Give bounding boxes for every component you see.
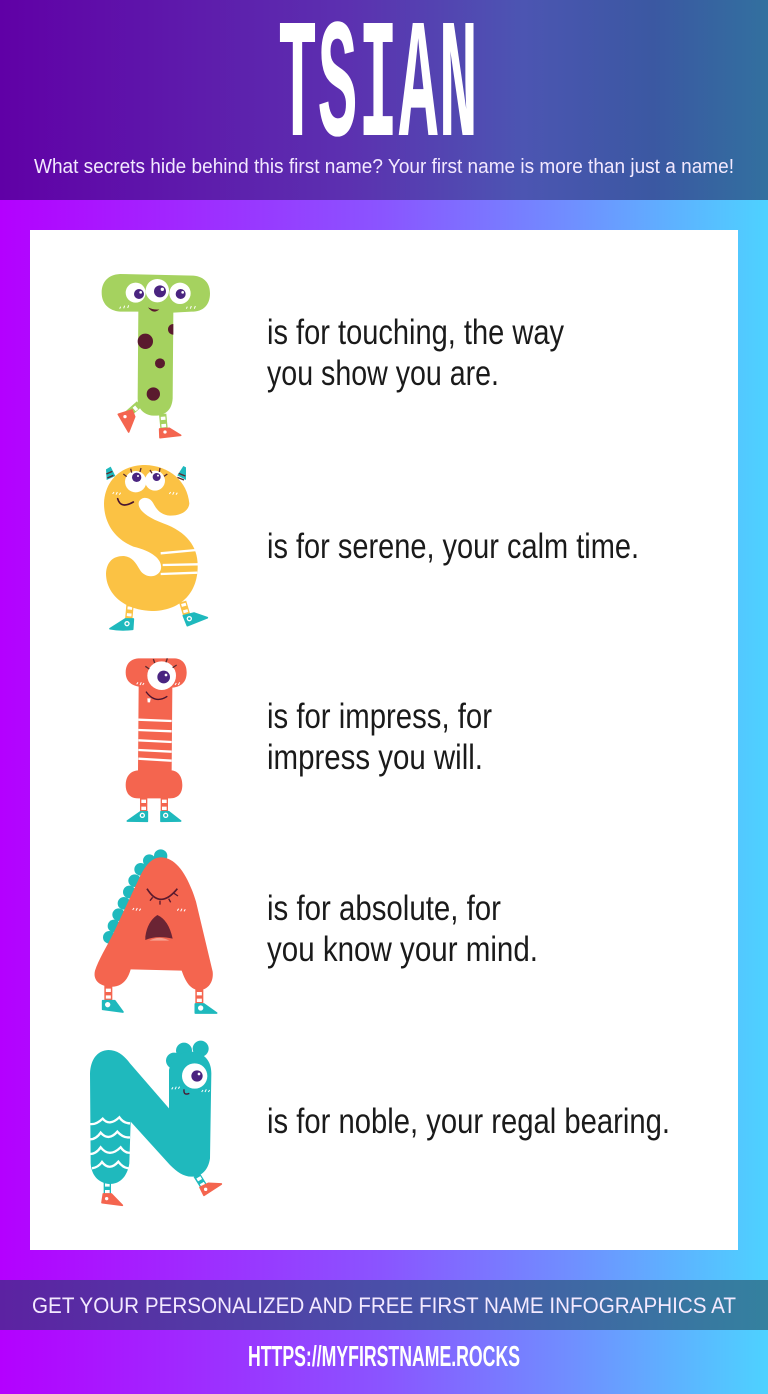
text: T line: is for touching, the way [267,313,564,352]
white content panel [30,230,738,1250]
header band [0,0,768,200]
text: I line: is for impress, for [267,697,492,736]
text: S line: is for serene, your calm time. [267,527,639,566]
footer url: HTTPS://MYFIRSTNAME.ROCKS [248,1341,520,1373]
icon: letter T monster [102,274,210,438]
text: I line: impress you will. [267,738,483,777]
footer call-to-action band [0,1280,768,1330]
text: A line: is for absolute, for [267,889,501,928]
icon: letter A monster [95,849,217,1013]
text: I line [267,697,492,777]
text: A line: you know your mind. [267,930,538,969]
subtitle: What secrets hide behind this first name? Your first name is more than just a name! [34,156,734,178]
icon: letter N monster [90,1041,221,1205]
footer text: GET YOUR PERSONALIZED AND FREE FIRST NAME INFOGRAPHICS AT [32,1293,736,1318]
text: A line [267,889,538,969]
text: T line [267,313,564,393]
icon: letter I monster [126,658,187,821]
text: N line: is for noble, your regal bearing. [267,1102,670,1141]
icon: letter S monster [104,465,207,630]
text: T line: you show you are. [267,354,499,393]
